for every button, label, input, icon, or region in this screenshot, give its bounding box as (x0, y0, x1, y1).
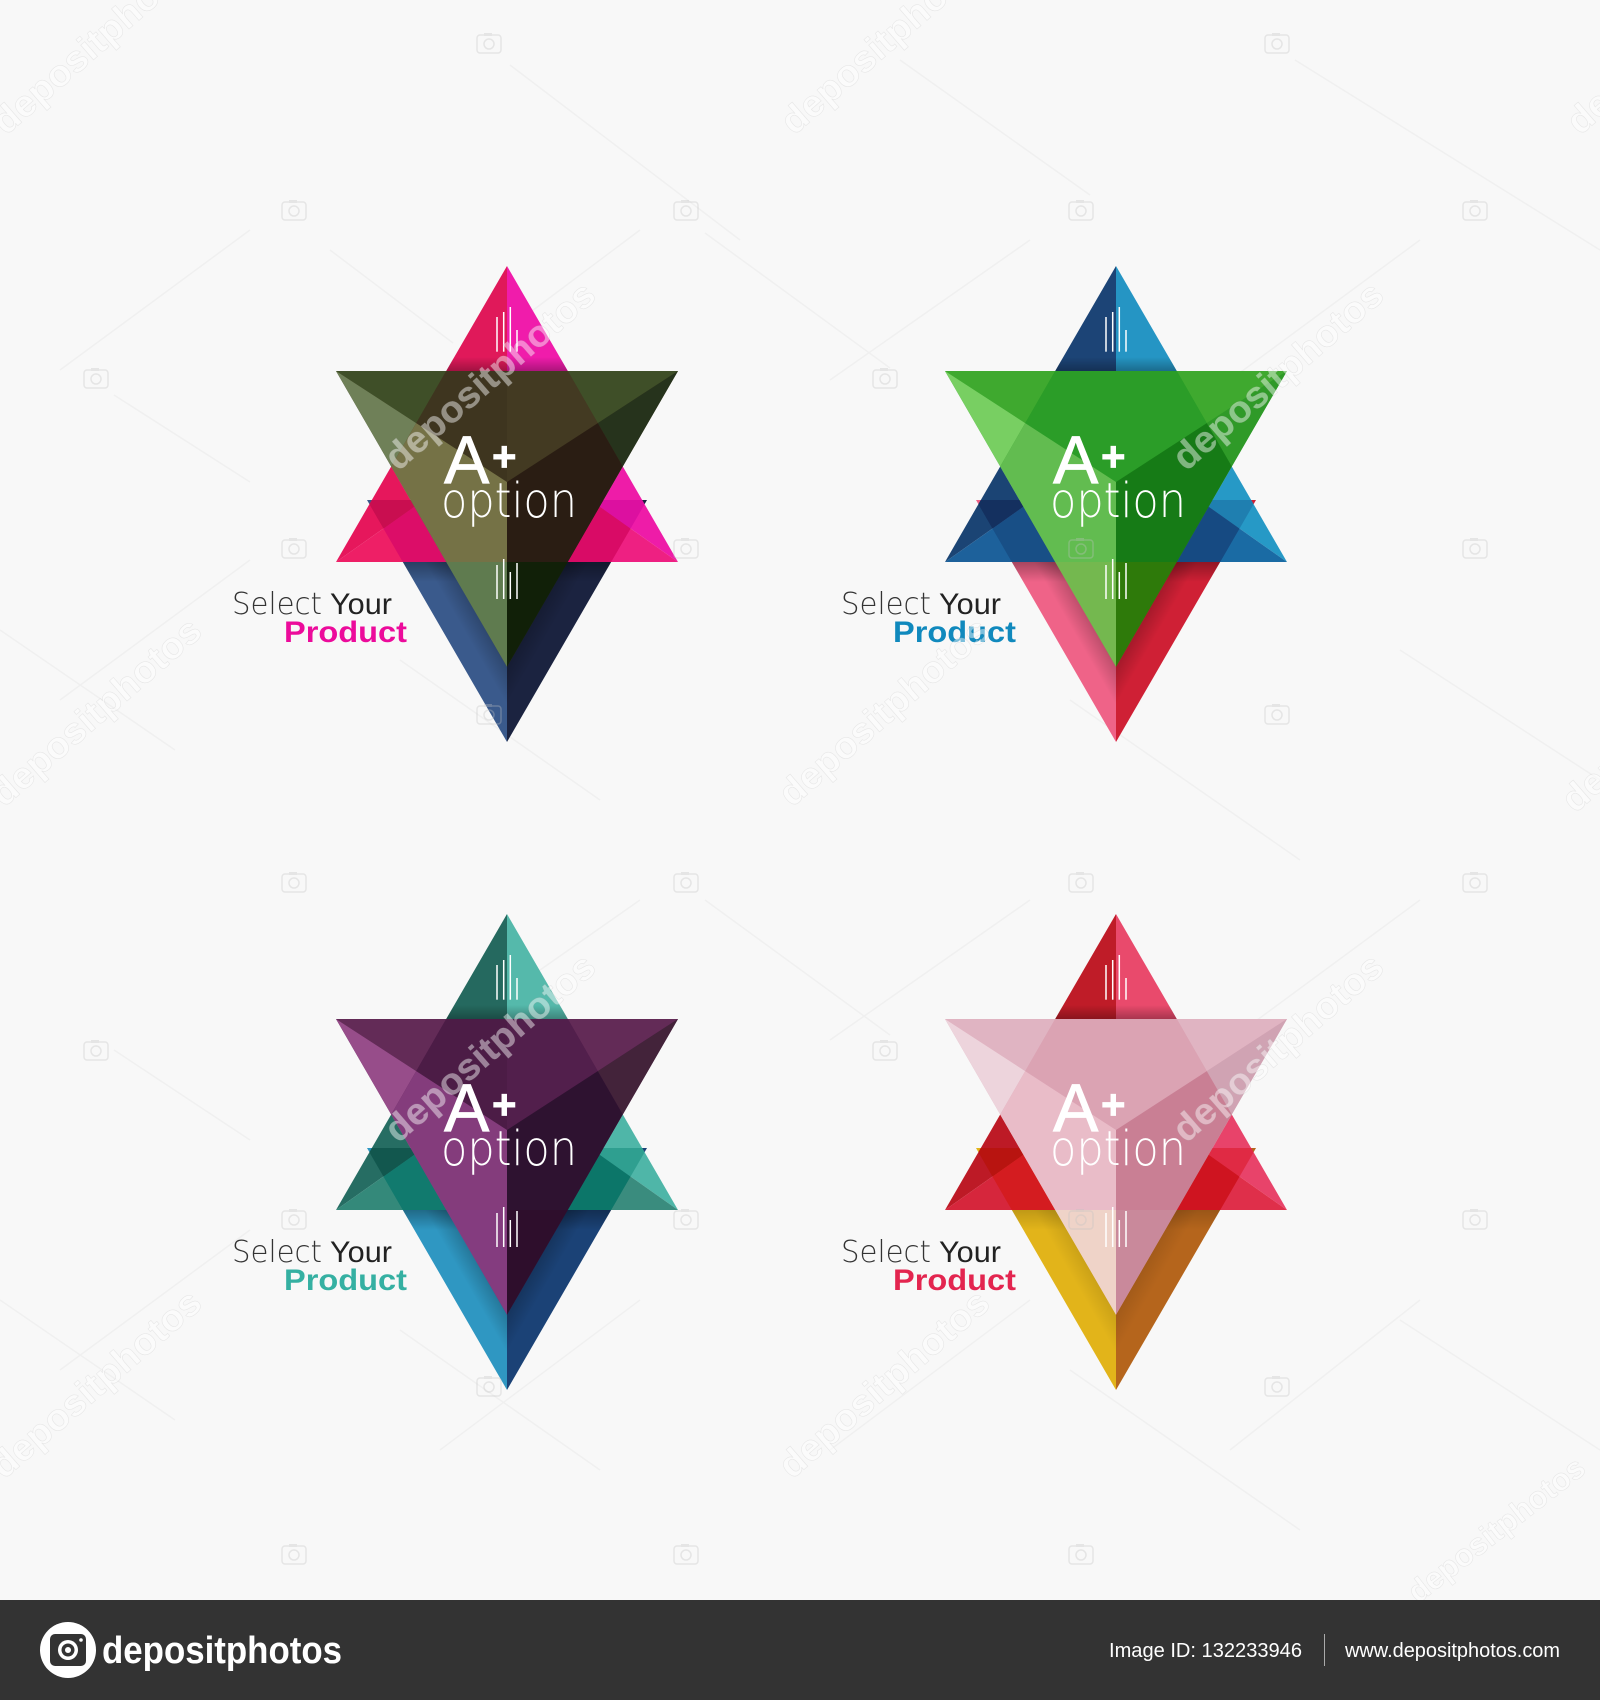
panel: star teal and purple (232, 914, 678, 1390)
option label: option (441, 1121, 577, 1177)
option label: option (1050, 1121, 1186, 1177)
caption: select your product: Select (232, 1235, 322, 1270)
caption: select your product: Select (232, 587, 322, 622)
caption: select your product (232, 587, 407, 649)
inverted purple triangle (336, 1019, 678, 1315)
option label: option (1050, 473, 1186, 529)
inverted green triangle (945, 371, 1287, 667)
caption: select your product: Select (841, 1235, 931, 1270)
inverted rose triangle (945, 1019, 1287, 1315)
caption: select your product: Your (330, 1236, 392, 1269)
caption: select your product (841, 1235, 1016, 1297)
watermark texts: depositphotos (770, 1281, 997, 1486)
icon: logo camera (40, 1622, 96, 1678)
watermark texts: depositphotos (1164, 273, 1391, 478)
website url: www.depositphotos.com (1344, 1640, 1560, 1662)
panel: star magenta and olive (232, 266, 678, 742)
icon: bottom bars (1106, 559, 1126, 599)
A+ label: + (492, 1081, 517, 1128)
watermark texts: depositphotos (770, 609, 997, 814)
caption: select your product: Select (841, 587, 931, 622)
watermark texts: depositphotos (376, 945, 603, 1150)
caption: select your product: Product (893, 1264, 1016, 1297)
A+ label: A (1053, 1070, 1098, 1146)
icon: top bars (1106, 955, 1126, 1000)
footer bar (0, 1600, 1600, 1700)
lower blue triangle (367, 1148, 647, 1390)
caption: select your product: Product (284, 616, 407, 649)
watermark texts: depositphotos (1401, 1450, 1592, 1610)
icon: top bars (1106, 307, 1126, 352)
option label: option (441, 473, 577, 529)
A+ label: + (1101, 433, 1126, 480)
A+ label: A (444, 1070, 489, 1146)
caption: select your product (232, 1235, 407, 1297)
A+ label: + (1101, 1081, 1126, 1128)
icon: top bars (497, 307, 517, 352)
A+ label: A (1053, 422, 1098, 498)
panel: star red and rose (841, 914, 1287, 1390)
upper magenta triangle (336, 266, 678, 562)
upper red triangle (945, 914, 1287, 1210)
watermark camera icons (84, 33, 1487, 1564)
panel: star blue and green (841, 266, 1287, 742)
icon: bottom bars (1106, 1207, 1126, 1247)
upper blue triangle (945, 266, 1287, 562)
A+ label: A (444, 422, 489, 498)
footer divider (1324, 1634, 1325, 1666)
inverted olive triangle (336, 371, 678, 667)
icon: top bars (497, 955, 517, 1000)
icon: bottom bars (497, 559, 517, 599)
logo wordmark: depositphotos (102, 1630, 342, 1672)
caption: select your product: Your (939, 1236, 1001, 1269)
lower yellow triangle (976, 1148, 1256, 1390)
caption: select your product: Product (284, 1264, 407, 1297)
lower navy triangle (367, 500, 647, 742)
watermark texts: depositphotos (376, 273, 603, 478)
lower pink triangle (976, 500, 1256, 742)
caption: select your product: Your (939, 588, 1001, 621)
caption: select your product (841, 587, 1016, 649)
icon: bottom bars (497, 1207, 517, 1247)
A+ label: + (492, 433, 517, 480)
caption: select your product: Product (893, 616, 1016, 649)
caption: select your product: Your (330, 588, 392, 621)
watermark texts: depositphotos (1164, 945, 1391, 1150)
image id: Image ID: 132233946 (1109, 1640, 1302, 1662)
upper teal triangle (336, 914, 678, 1210)
